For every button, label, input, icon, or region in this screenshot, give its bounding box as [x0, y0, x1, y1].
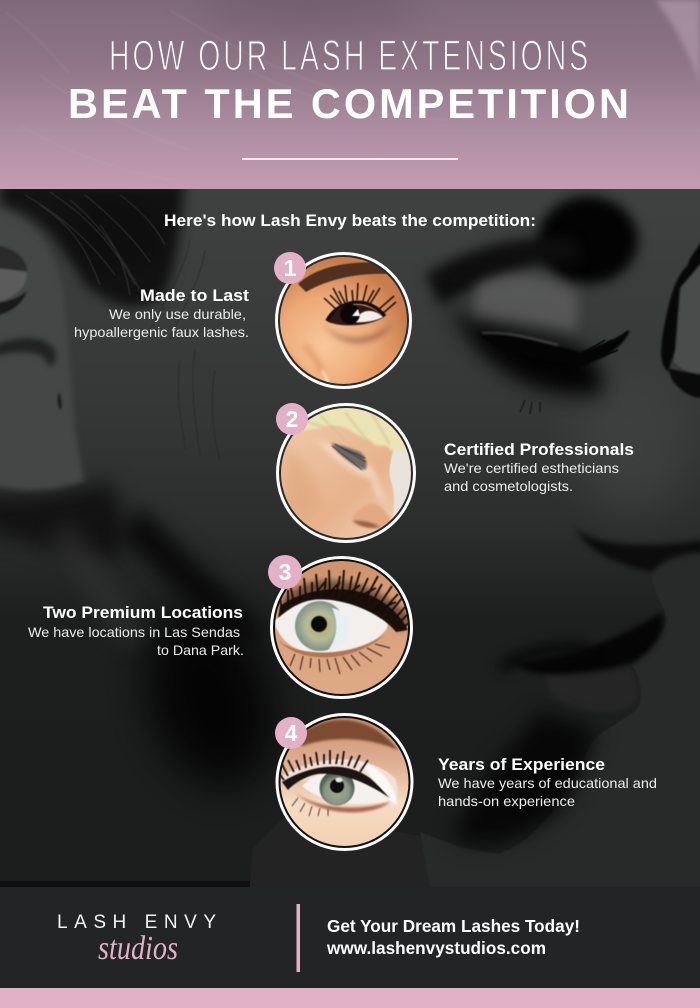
item 4 text: [438, 755, 657, 809]
item 1 text: Made to Last: [140, 286, 249, 305]
item 4: years of experience: [275, 713, 657, 853]
item 4 text: hands-on experience: [438, 793, 575, 809]
number badge 4: [275, 717, 307, 749]
item 3 text: Two Premium Locations: [43, 603, 243, 622]
far eye and lashes: [661, 240, 700, 398]
header panel: [0, 0, 700, 189]
title: BEAT THE COMPETITION: [68, 80, 629, 127]
item 3 text: [28, 603, 244, 658]
item 3: two premium locations: [28, 555, 414, 700]
background portrait: [0, 182, 700, 890]
number badge 3: [268, 555, 302, 589]
intro heading: Here's how Lash Envy beats the competition:: [164, 211, 536, 230]
item 4 photo: eye: [275, 713, 415, 853]
call to action: www.lashenvystudios.com: [326, 938, 546, 958]
item 1 text: [74, 286, 249, 340]
item 2 text: Certified Professionals: [444, 440, 634, 459]
ear and hair: [0, 182, 220, 490]
title: HOW OUR LASH EXTENSIONS: [109, 31, 592, 79]
call to action: Get Your Dream Lashes Today!: [327, 916, 580, 936]
item 2 text: [444, 440, 634, 494]
footer bar: [0, 887, 700, 988]
item 1: made to last: [74, 252, 415, 392]
item 2 photo: profile: [270, 403, 418, 548]
side background right of profile: [420, 603, 700, 887]
item 1 text: hypoallergenic faux lashes.: [74, 324, 249, 340]
item 3 text: We have locations in Las Sendas: [28, 624, 240, 640]
item 3 photo: eye: [270, 556, 414, 700]
number badge 1: 1: [284, 255, 297, 281]
item 3 text: to Dana Park.: [157, 642, 244, 658]
number badge 1: [274, 252, 306, 284]
item 2: certified professionals: [270, 403, 634, 548]
item 2 text: and cosmetologists.: [444, 478, 573, 494]
neck shadow and shoulder: [0, 478, 282, 887]
item 4 text: Years of Experience: [438, 755, 605, 774]
item 1 photo: eye: [275, 252, 415, 392]
number badge 3: 3: [279, 559, 291, 585]
number badge 2: [276, 403, 308, 435]
logo: LASH ENVY: [57, 912, 216, 933]
nose, lips and chin shading: [452, 528, 700, 843]
title: [68, 31, 629, 127]
number badge 4: 4: [285, 720, 298, 746]
item 2 text: We're certified estheticians: [444, 460, 619, 476]
number badge 2: 2: [286, 406, 298, 432]
call to action: [326, 916, 580, 958]
item 4 text: We have years of educational and: [438, 775, 657, 791]
logo: studios: [98, 930, 178, 967]
logo: [57, 912, 216, 967]
item 1 text: We only use durable,: [109, 306, 246, 322]
bottom pink band: [0, 988, 700, 1008]
closed eye lashes: [478, 330, 630, 414]
cheek and eye socket tones: [425, 196, 690, 515]
